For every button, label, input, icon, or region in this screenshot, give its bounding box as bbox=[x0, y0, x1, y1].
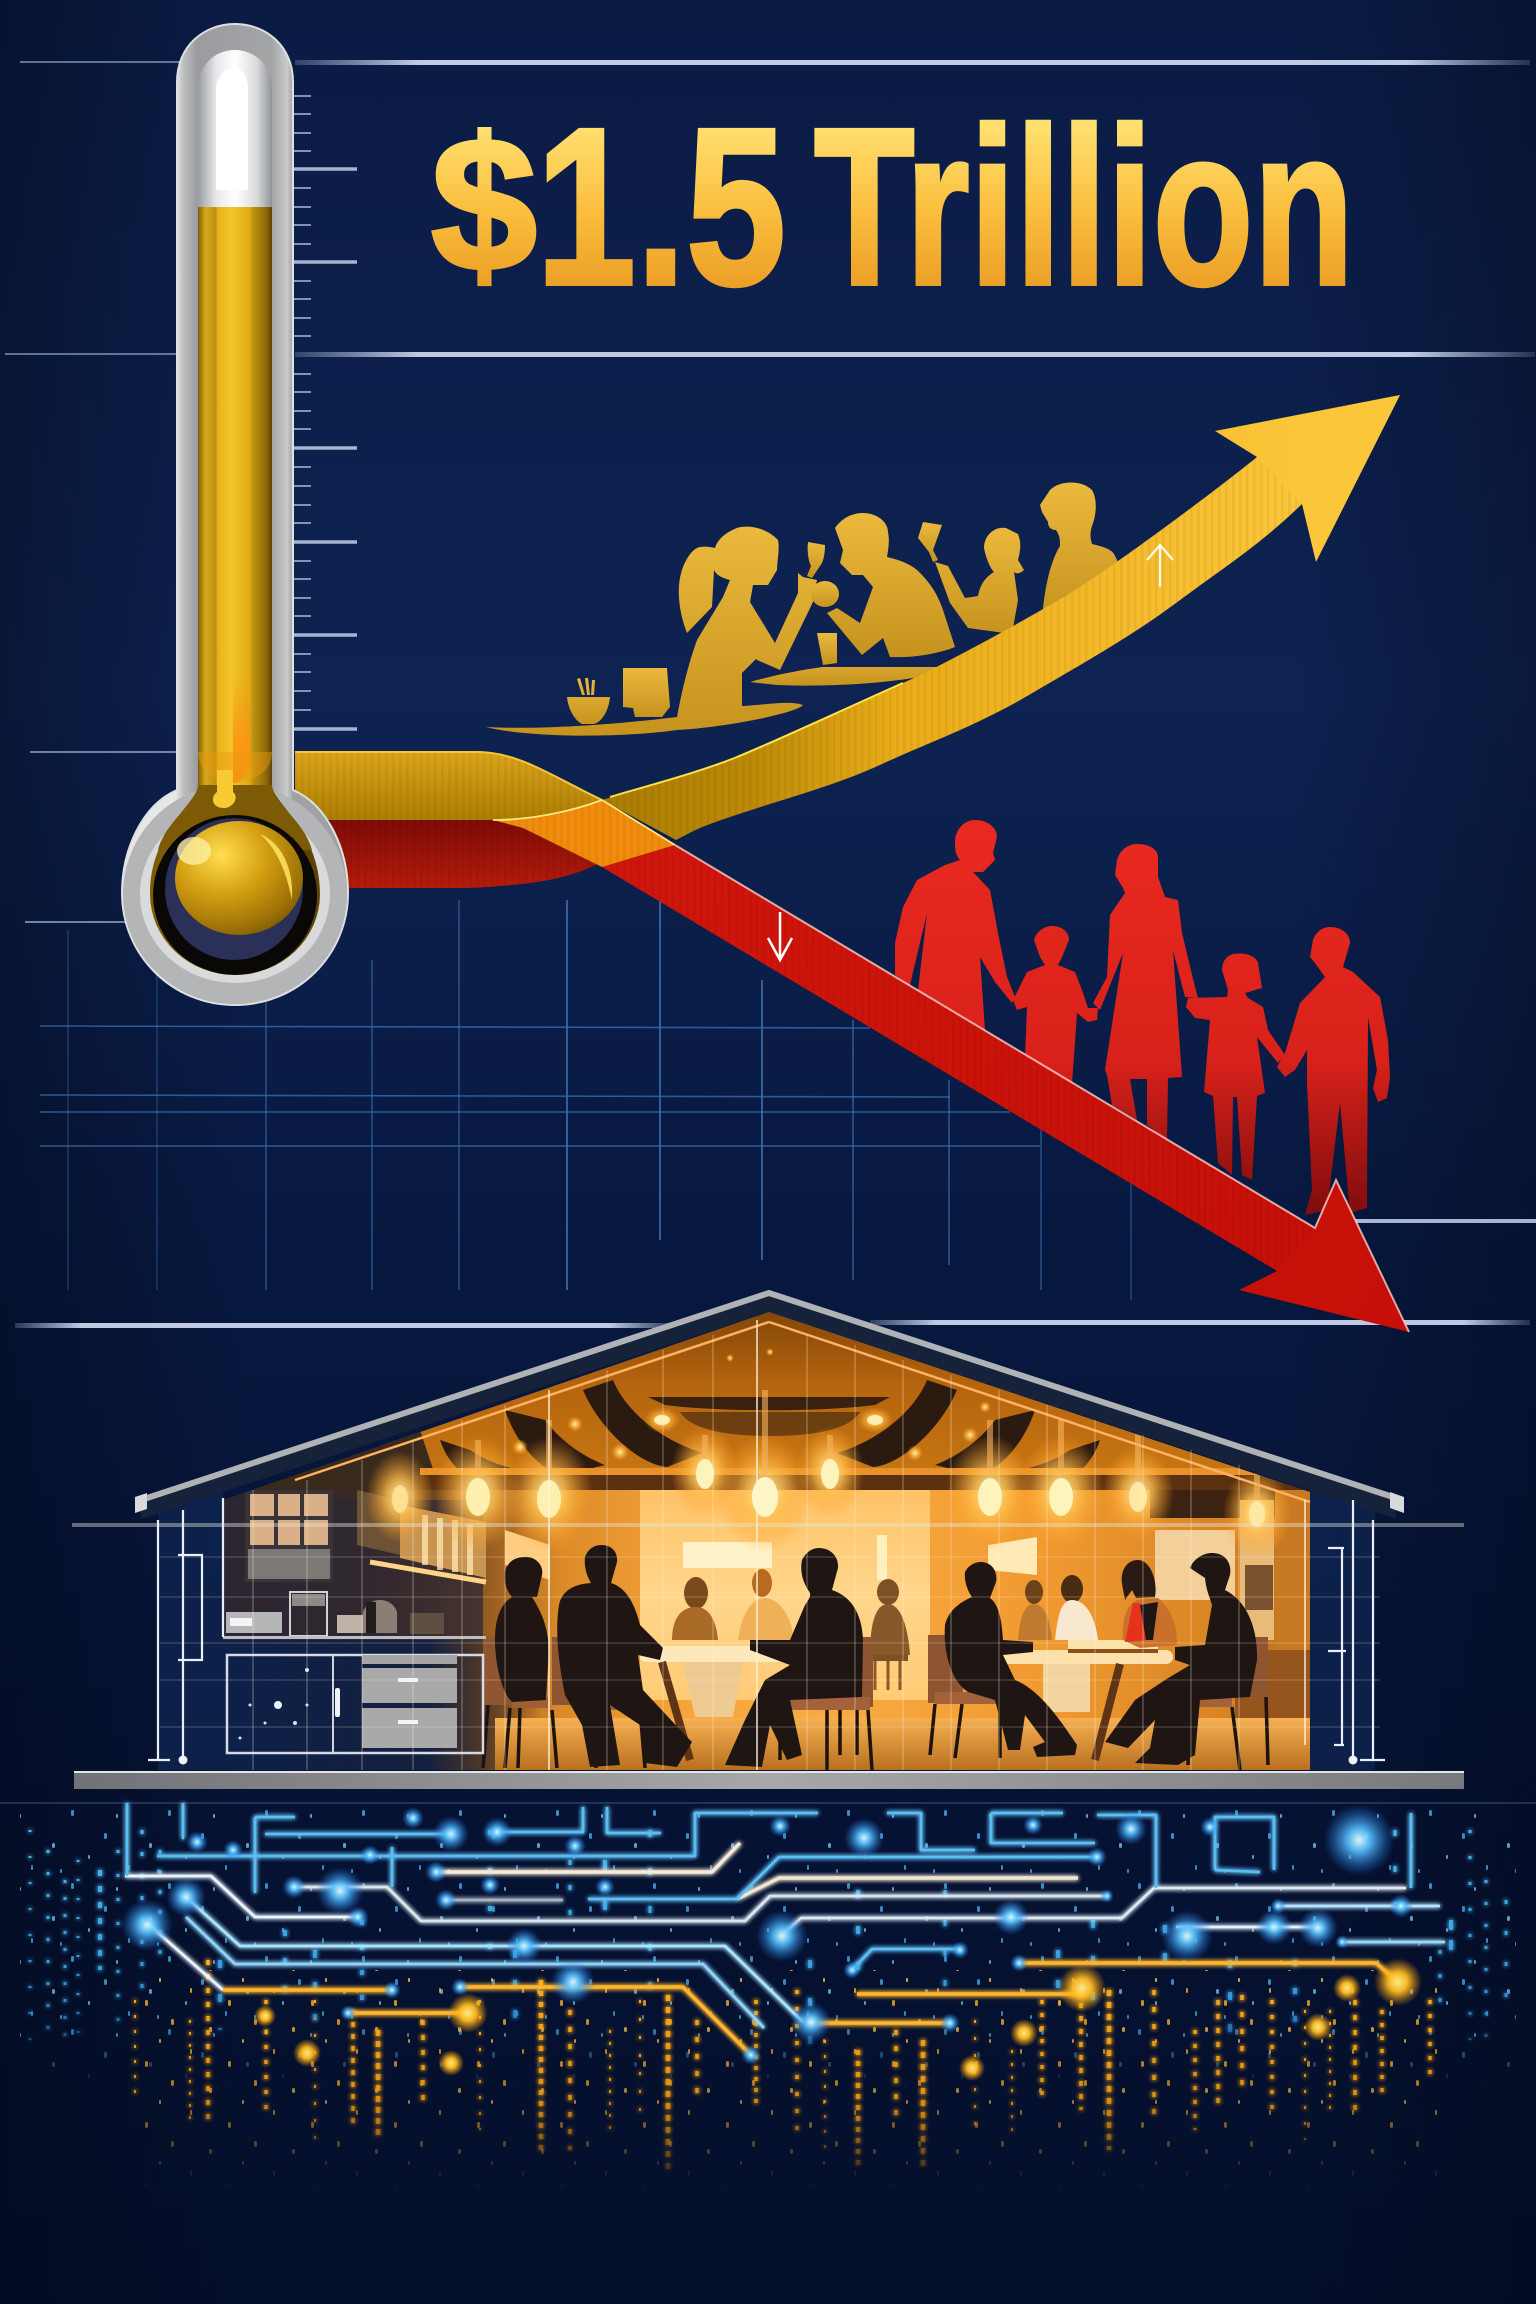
coffee mug bbox=[623, 668, 670, 717]
background diners bbox=[672, 1569, 1098, 1690]
blueprint overlay lines bbox=[72, 1320, 1464, 1770]
white up arrow mark bbox=[1147, 545, 1173, 587]
right wall window bbox=[988, 1537, 1037, 1575]
ball highlight bbox=[177, 837, 211, 865]
wall pillar light bbox=[877, 1535, 887, 1580]
blue rain columns bbox=[30, 1830, 1506, 2050]
circuit glowing nodes bbox=[121, 1804, 1422, 2081]
gold ball bbox=[175, 821, 303, 935]
navy reflection bbox=[165, 818, 303, 960]
neck darkening bbox=[158, 785, 312, 850]
bulb inner ring bbox=[140, 805, 330, 983]
tables bbox=[640, 1640, 1173, 1760]
gold rain columns bbox=[135, 1960, 1430, 2170]
bulb recess bbox=[153, 815, 317, 975]
thermometer bbox=[122, 24, 348, 1005]
ceiling beams bbox=[440, 1380, 1100, 1468]
raised glass bbox=[918, 522, 942, 562]
gold upward arrow bbox=[602, 395, 1400, 840]
man right table bbox=[945, 1562, 1077, 1757]
wine glass bbox=[807, 542, 825, 578]
mother bbox=[1093, 844, 1198, 1140]
white down arrow mark bbox=[768, 912, 792, 960]
back wall window bbox=[683, 1542, 772, 1568]
scattered gold dots bbox=[130, 1970, 1450, 2190]
liquid column and neck bbox=[150, 207, 320, 975]
liquid level band bbox=[198, 752, 272, 783]
title: Trillion bbox=[814, 82, 1354, 332]
woman in red bbox=[1122, 1560, 1177, 1648]
woman diner with left table bbox=[486, 527, 817, 736]
ceiling side darks bbox=[252, 1432, 433, 1490]
stem drip bbox=[213, 770, 236, 808]
roof bbox=[135, 1293, 1404, 1519]
foreground diners bbox=[495, 1545, 1257, 1767]
upper kitchen window bbox=[245, 1490, 333, 1582]
glass body bbox=[122, 24, 348, 1005]
man diner bbox=[827, 513, 955, 657]
kitchen appliances bbox=[223, 1592, 486, 1753]
bulb silver fill bbox=[123, 784, 347, 1004]
circuit traces bbox=[125, 1803, 1445, 2055]
interior room bbox=[223, 1300, 1313, 1780]
chair legs bbox=[483, 1697, 1268, 1770]
gold flat band bbox=[295, 752, 602, 820]
kitchen shelf bbox=[357, 1490, 550, 1582]
chairs bbox=[483, 1635, 1268, 1710]
man at right bbox=[1040, 482, 1122, 620]
boy bbox=[1013, 926, 1098, 1085]
ball reflection arc bbox=[260, 834, 292, 900]
cap highlight bbox=[216, 68, 248, 190]
noodle bowl bbox=[567, 678, 610, 724]
child diner bbox=[935, 528, 1024, 634]
floor bbox=[495, 1718, 1310, 1770]
red downward arrow bbox=[602, 845, 1409, 1332]
side wall panels bbox=[158, 1490, 1375, 1770]
red ribbon lower flat band bbox=[330, 820, 600, 888]
house bbox=[72, 1293, 1464, 1789]
orange stem tint bbox=[233, 680, 250, 783]
title: 1.5 bbox=[536, 82, 786, 332]
title: $ bbox=[431, 99, 537, 311]
second man bbox=[1277, 927, 1390, 1215]
ceiling bbox=[380, 1312, 1238, 1468]
man back left bbox=[557, 1545, 692, 1767]
girl bbox=[1186, 953, 1285, 1180]
silver tube cap bbox=[198, 50, 272, 207]
right wall shelves bbox=[1150, 1490, 1310, 1718]
digital rain bbox=[20, 1810, 1516, 2190]
title bbox=[431, 82, 1354, 332]
pendant lamps bbox=[366, 1348, 1291, 1559]
man far right bbox=[1105, 1553, 1257, 1765]
blueprint horizontal rules bbox=[0, 60, 1536, 1804]
side woman bbox=[495, 1557, 549, 1702]
red family silhouette bbox=[895, 820, 1390, 1215]
right table top bbox=[750, 650, 1000, 686]
thermometer scale ticks bbox=[285, 96, 357, 729]
cornice band bbox=[420, 1468, 1310, 1490]
hand cup bbox=[811, 581, 839, 607]
diners silhouette bbox=[486, 482, 1122, 736]
ribbon crossing overlap bbox=[493, 800, 675, 867]
kitchen wall bbox=[223, 1500, 483, 1640]
scattered blue dots bbox=[20, 1810, 1516, 2100]
back wall bbox=[640, 1490, 930, 1700]
father bbox=[895, 820, 1015, 1030]
left kitchen shadow bbox=[223, 1640, 543, 1775]
tumbler bbox=[817, 633, 837, 665]
chart grid bbox=[40, 900, 1131, 1300]
man center bbox=[725, 1548, 863, 1767]
floor slab bbox=[74, 1771, 1464, 1789]
